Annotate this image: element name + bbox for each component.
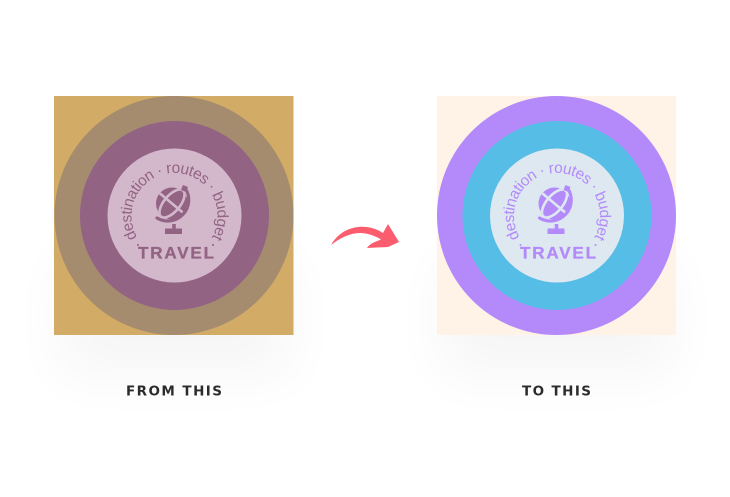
- caption: to this: TO THIS: [522, 384, 591, 400]
- inner circle: [108, 148, 242, 282]
- circular text: destination · routes · budget: [120, 164, 229, 241]
- comparison graphic: [54, 96, 676, 396]
- outer ring: [54, 96, 294, 335]
- circular text: destination · routes · budget: [503, 164, 612, 242]
- TRAVEL wordmark: TRAVEL: [520, 244, 596, 262]
- TRAVEL wordmark: TRAVEL: [138, 244, 214, 262]
- caption: from this: FROM THIS: [126, 384, 222, 400]
- soft shadows: [60, 260, 672, 375]
- icon: arrow: [331, 224, 399, 248]
- dots: [520, 244, 522, 246]
- panel: from this logo: [54, 96, 294, 335]
- panel: to this logo: [437, 96, 676, 335]
- icon: globe: [155, 185, 190, 234]
- inner circle: [490, 148, 624, 282]
- icon: globe: [538, 185, 573, 234]
- dots: [137, 244, 139, 246]
- background square: [54, 96, 294, 335]
- outer ring: [437, 96, 676, 335]
- background square: [437, 96, 676, 335]
- middle ring: [462, 121, 652, 310]
- middle ring: [80, 121, 269, 310]
